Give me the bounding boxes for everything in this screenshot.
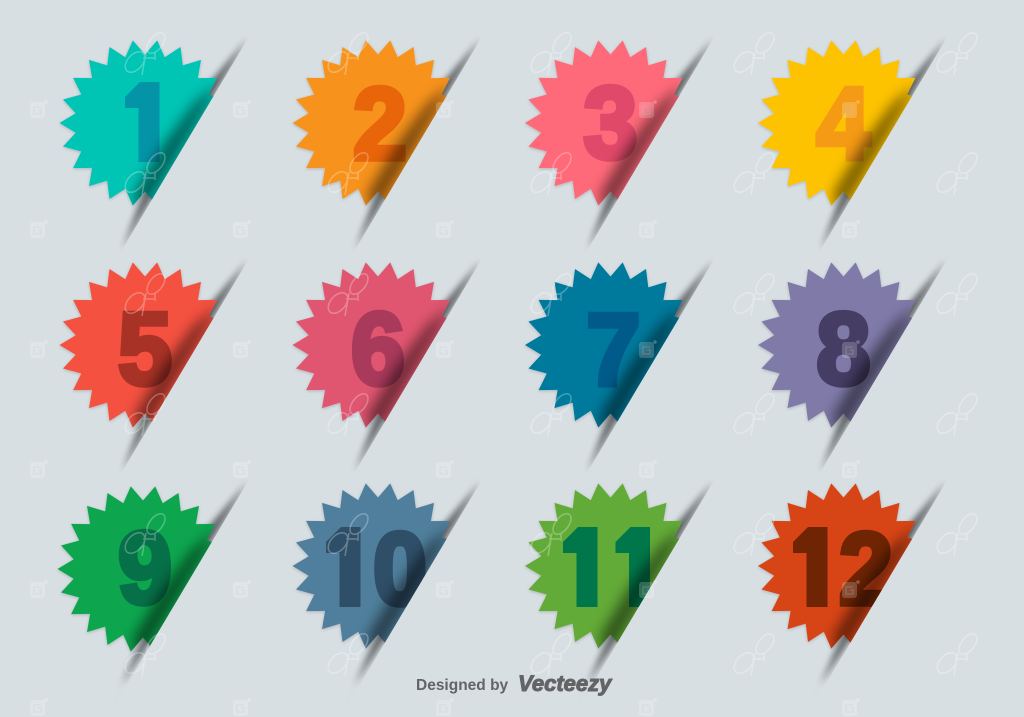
badge 2: 2 bbox=[353, 68, 407, 182]
badge 12: 2 bbox=[839, 513, 893, 627]
badge 2 bbox=[292, 38, 481, 250]
badge 12 bbox=[758, 483, 944, 683]
badge 11 bbox=[525, 483, 712, 683]
badge 6: 6 bbox=[351, 293, 405, 407]
credit line bbox=[416, 671, 613, 696]
badge 1 bbox=[60, 38, 248, 250]
credit line: Designed by bbox=[416, 677, 509, 694]
watermark logos bbox=[121, 30, 981, 677]
badge 7 bbox=[525, 260, 714, 472]
badge 5: 5 bbox=[118, 293, 172, 407]
watermark small icons bbox=[30, 100, 860, 716]
badge 1: 1 bbox=[123, 70, 180, 184]
badge 3: 3 bbox=[584, 67, 637, 181]
badge 9: 9 bbox=[118, 512, 172, 626]
badge 8: 8 bbox=[817, 293, 870, 407]
badge 6 bbox=[292, 260, 481, 472]
credit line: Vecteezy bbox=[518, 671, 613, 696]
badge 7: 7 bbox=[587, 294, 640, 408]
badge 4: 4 bbox=[817, 68, 870, 182]
badge 12: 1 bbox=[791, 515, 848, 629]
badge 10: 1 bbox=[324, 515, 381, 629]
badge 3 bbox=[525, 38, 714, 250]
badge 10: 0 bbox=[373, 513, 427, 627]
badge 4 bbox=[758, 38, 946, 250]
badge 5 bbox=[60, 260, 248, 472]
badge 10 bbox=[292, 483, 479, 683]
badge 9 bbox=[58, 483, 246, 683]
badge 11: 1 bbox=[614, 515, 670, 629]
badge 8 bbox=[758, 260, 946, 472]
badge 11: 1 bbox=[561, 515, 618, 629]
